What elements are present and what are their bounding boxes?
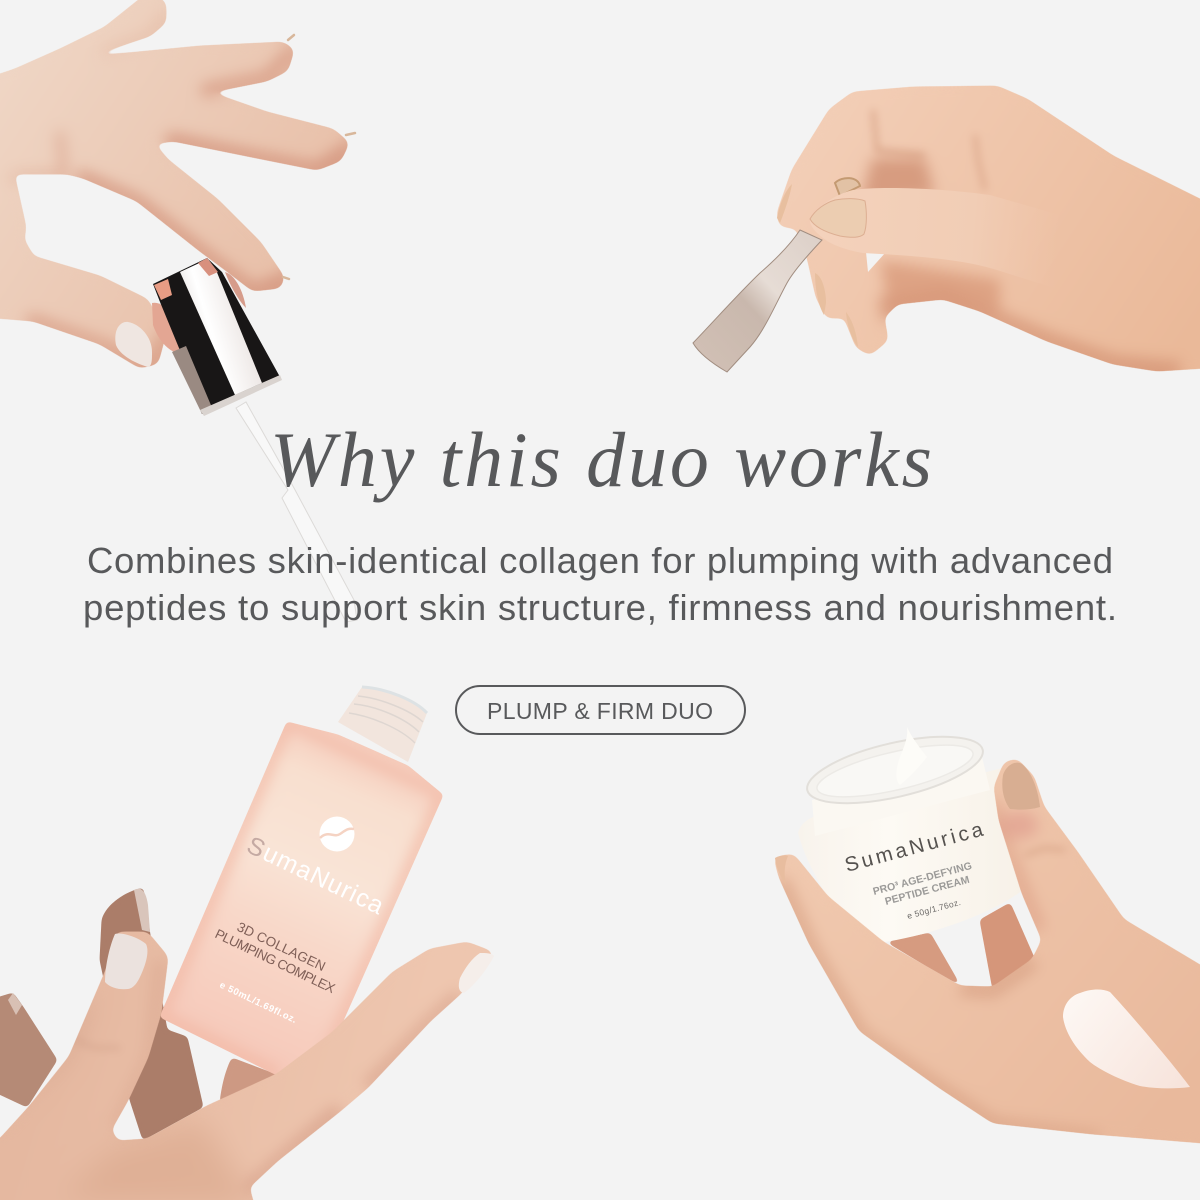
bottle product name: 3D COLLAGEN xyxy=(235,919,328,974)
back fingers xyxy=(887,903,1035,990)
pill label xyxy=(456,686,745,734)
cream peak xyxy=(896,727,927,785)
thumb xyxy=(810,188,1100,290)
hand: top left holding dropper xyxy=(0,0,355,368)
nail: index xyxy=(105,934,147,989)
jar product name: PEPTIDE CREAM xyxy=(884,874,971,908)
serum bottle xyxy=(160,687,443,1075)
body text: peptides to support skin structure, firmness and nourishment. xyxy=(83,587,1117,628)
body text: Combines skin-identical collagen for plumping with advanced xyxy=(87,540,1113,581)
spatula xyxy=(693,178,860,372)
nail: index and lower fingers xyxy=(777,184,858,347)
nail: thumb xyxy=(810,199,866,237)
jar size: e 50g/1.76oz. xyxy=(906,897,962,921)
body text xyxy=(83,540,1117,628)
dropper cap xyxy=(153,258,282,416)
nail: thumb xyxy=(115,322,152,367)
bottle body xyxy=(160,722,443,1075)
jar glass rim xyxy=(801,723,989,817)
jar body xyxy=(798,768,1023,942)
dropper glass tube xyxy=(236,402,357,622)
hand: bottom left holding bottle xyxy=(0,933,494,1200)
hand xyxy=(775,760,1200,1145)
nail: thumb xyxy=(459,953,494,993)
cream jar xyxy=(798,723,1023,942)
bottle neck xyxy=(338,687,427,762)
gap between fingers xyxy=(866,252,886,272)
bottle logo xyxy=(320,816,354,852)
nail: little finger xyxy=(775,855,788,885)
bottle size: e 50mL/1.69fl.oz. xyxy=(218,980,298,1026)
cream swatch xyxy=(1063,989,1190,1088)
pill label: PLUMP & FIRM DUO xyxy=(487,698,713,724)
nail tips xyxy=(283,35,355,279)
hand: top right with spatula xyxy=(693,87,1200,375)
finger pad behind cap xyxy=(152,303,188,353)
hand: bottom right with cream jar xyxy=(775,723,1200,1145)
bottle brand: SumaNurica xyxy=(242,831,388,920)
bottle product name: PLUMPING COMPLEX xyxy=(213,926,337,996)
nail: thumb xyxy=(1002,763,1040,810)
jar brand: SumaNurica xyxy=(842,818,986,877)
hand behind bottle: back fingers xyxy=(0,888,285,1140)
title: Why this duo works xyxy=(270,416,932,503)
dropper xyxy=(152,258,357,622)
jar product name: PRO³ AGE-DEFYING xyxy=(872,860,973,898)
